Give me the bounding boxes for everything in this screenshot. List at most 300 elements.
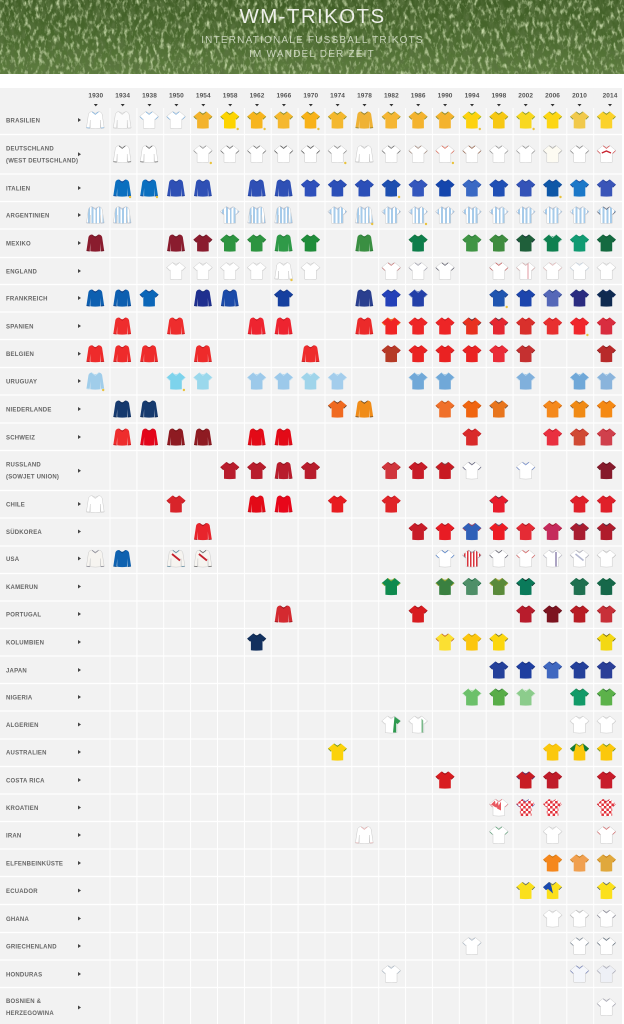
year 1930	[88, 92, 104, 106]
jersey 2014	[597, 112, 616, 129]
year axis	[88, 92, 618, 106]
jersey 2002	[516, 206, 535, 224]
jersey 1950	[167, 550, 185, 567]
row: Kamerun	[6, 578, 616, 595]
year 1950	[169, 92, 184, 106]
jersey 1990	[435, 318, 455, 335]
jersey 1990	[435, 112, 455, 129]
jersey 1966	[275, 428, 292, 446]
jersey 2014	[597, 826, 616, 844]
row: Chile	[6, 496, 616, 513]
arrow	[78, 1006, 81, 1010]
year 1986: 1986	[411, 92, 426, 99]
label: GRIECHENLAND	[6, 944, 57, 950]
jersey 1998	[489, 799, 508, 816]
row: Iran	[6, 826, 616, 844]
jersey 1982	[382, 496, 401, 513]
jersey 1930	[86, 112, 104, 129]
row: Ecuador	[6, 882, 616, 899]
label: ECUADOR	[6, 889, 38, 895]
year 1970	[303, 92, 319, 106]
jersey 1982	[382, 290, 401, 307]
jersey 2002	[516, 318, 535, 335]
year 1994	[465, 92, 480, 106]
row: Costa Rica	[6, 772, 616, 789]
jersey 1938	[140, 146, 158, 163]
jersey 1930	[86, 290, 104, 307]
label: ALGERIEN	[6, 723, 39, 729]
label: ELFENBEINKÜSTE	[6, 860, 63, 867]
jersey 2010	[570, 550, 589, 567]
jersey 2010	[570, 910, 589, 927]
year 1986	[411, 92, 426, 106]
jersey 2010	[570, 662, 589, 679]
jersey 1950	[166, 112, 186, 129]
jersey 1974	[328, 744, 347, 761]
jersey 1934	[113, 146, 131, 163]
label: BELGIEN	[6, 352, 34, 358]
jersey 1966	[274, 290, 293, 307]
jersey 1994	[462, 206, 482, 224]
row: Japan	[6, 662, 616, 679]
jersey 1938	[140, 112, 159, 129]
jersey 2014	[597, 496, 616, 513]
jersey 1974 winner	[328, 146, 347, 164]
year 1978: 1978	[357, 92, 372, 99]
row: Niederlande	[6, 400, 616, 418]
year 1974: 1974	[330, 92, 345, 99]
jersey 2006	[543, 234, 562, 252]
label: URUGUAY	[6, 379, 37, 385]
jersey 1934	[113, 345, 131, 362]
jersey 2010	[570, 606, 589, 623]
jersey 1994	[462, 234, 482, 252]
row: Frankreich	[6, 290, 616, 308]
jersey 1966	[274, 146, 293, 163]
arrow	[78, 916, 81, 920]
jersey 1966	[275, 606, 292, 623]
subtitle: IM WANDEL DER ZEIT	[249, 49, 375, 60]
jersey 2006	[543, 550, 562, 567]
jersey 1990	[435, 180, 455, 197]
jersey 1962	[248, 496, 266, 513]
jersey 1934 winner	[113, 180, 131, 198]
jersey 1990	[435, 772, 455, 789]
jersey 1962	[247, 372, 266, 390]
jersey 2014	[597, 372, 616, 390]
label: (WEST DEUTSCHLAND)	[6, 159, 78, 165]
jersey 1934	[113, 112, 131, 129]
jersey 2014	[597, 523, 616, 540]
jersey 1986	[408, 523, 428, 540]
jersey 1990	[435, 400, 455, 418]
jersey 2010	[570, 523, 589, 540]
jersey 1982	[382, 318, 401, 335]
jersey 1966	[275, 462, 292, 479]
jersey 2006	[543, 262, 562, 280]
jersey 2002	[516, 462, 535, 479]
arrow	[78, 241, 81, 245]
arrow	[78, 695, 81, 699]
jersey 2006	[543, 744, 562, 761]
label: AUSTRALIEN	[6, 750, 47, 756]
jersey 2002	[516, 882, 535, 899]
jersey 1986	[408, 234, 428, 252]
label: ENGLAND	[6, 269, 38, 275]
arrow	[78, 296, 81, 300]
jersey 1990	[435, 345, 455, 362]
jersey 1986	[408, 318, 428, 335]
arrow	[78, 269, 81, 273]
jersey 2006	[543, 910, 562, 927]
year 1966: 1966	[276, 92, 292, 99]
jersey 1986	[408, 262, 428, 280]
header: grass banner	[0, 0, 624, 74]
jersey 1986	[408, 345, 428, 362]
jersey 1994	[462, 146, 482, 163]
jersey 1994	[462, 400, 482, 418]
row: Südkorea	[6, 523, 616, 540]
jersey 1930	[86, 550, 104, 567]
jersey 2014	[597, 318, 616, 335]
row: Argentinien	[6, 206, 616, 225]
arrow	[78, 530, 81, 534]
jersey 2006	[543, 523, 562, 540]
jersey 2010	[570, 400, 589, 418]
jersey 2014	[597, 744, 616, 761]
arrow	[78, 469, 81, 473]
jersey 2010	[570, 966, 589, 983]
jersey 1990	[435, 206, 455, 224]
year 1938	[142, 92, 157, 106]
label: SÜDKOREA	[6, 529, 42, 536]
year 2006: 2006	[545, 92, 560, 99]
jersey 2010	[570, 428, 589, 446]
year 1934: 1934	[115, 92, 130, 99]
jersey 1954	[194, 550, 212, 567]
jersey 2006 winner	[543, 180, 562, 198]
jersey 2002	[516, 523, 535, 540]
jersey 1982	[382, 462, 401, 479]
jersey 2006	[543, 400, 562, 418]
subtitle	[201, 35, 424, 60]
jersey 2014	[597, 234, 616, 252]
jersey 2010 winner	[570, 318, 589, 336]
jersey 1958	[220, 206, 239, 224]
jersey 1998	[489, 826, 508, 844]
row: Bosnien & Herzegowina	[6, 998, 616, 1017]
jersey 2006	[543, 799, 562, 816]
jersey 1998	[489, 234, 508, 252]
jersey 1990	[435, 634, 455, 651]
row: Ghana	[6, 910, 616, 927]
jersey 2006	[543, 206, 562, 224]
jersey 1970	[301, 180, 320, 197]
arrow	[78, 435, 81, 439]
jersey 2014	[597, 998, 616, 1016]
jersey 1954	[193, 372, 212, 390]
arrow	[78, 888, 81, 892]
jersey 1962	[247, 462, 266, 479]
label: BOSNIEN &	[6, 999, 41, 1005]
jersey 1938 winner	[140, 180, 158, 198]
row: Griechenland	[6, 938, 616, 955]
jersey 1974	[328, 206, 347, 224]
jersey 1958	[220, 262, 239, 280]
label: ARGENTINIEN	[6, 213, 50, 219]
year 1958	[223, 92, 238, 106]
jersey 1986	[408, 180, 428, 197]
jersey 1962	[247, 234, 266, 252]
jersey 1986	[408, 290, 428, 307]
jersey 1994 winner	[462, 112, 482, 130]
jersey 1962	[247, 634, 266, 651]
jersey 1974	[328, 180, 347, 197]
jersey 1934	[113, 428, 131, 446]
jersey 1998	[489, 496, 508, 513]
jersey 1958	[220, 146, 239, 163]
jersey 1938	[140, 345, 158, 362]
jersey 1982 winner	[382, 180, 401, 198]
arrow	[78, 502, 81, 506]
arrow	[78, 407, 81, 411]
jersey 2014	[597, 462, 616, 479]
jersey 1934	[113, 206, 131, 224]
jersey 2014	[597, 290, 616, 307]
jersey 2002	[516, 799, 535, 816]
label: KOLUMBIEN	[6, 640, 44, 646]
row: England	[6, 262, 616, 281]
jersey 2006	[543, 826, 562, 844]
jersey 1962	[247, 262, 266, 280]
arrow	[78, 324, 81, 328]
jersey 1970	[302, 345, 319, 362]
jersey 1998	[489, 578, 508, 595]
jersey 1982	[382, 146, 401, 163]
jersey 2014	[597, 716, 616, 733]
jersey 2014	[597, 400, 616, 418]
jersey 1990	[435, 578, 455, 595]
label: FRANKREICH	[6, 296, 48, 302]
jersey 2010	[570, 112, 589, 129]
jersey 1978	[355, 290, 373, 307]
year 1978	[357, 92, 372, 106]
year 1982	[384, 92, 399, 106]
jersey 1978	[355, 400, 373, 418]
jersey 1958	[221, 290, 239, 307]
jersey 1954	[194, 180, 212, 197]
jersey 1994	[462, 345, 482, 362]
year 1998	[491, 92, 507, 106]
jersey 1930 winner	[86, 372, 104, 391]
jersey 1978	[355, 180, 374, 197]
jersey 1950	[167, 318, 185, 335]
row: Belgien	[6, 345, 616, 362]
row: Russland	[6, 462, 616, 480]
jersey 1994	[462, 462, 482, 479]
jersey 2010	[570, 262, 589, 280]
label: JAPAN	[6, 668, 27, 674]
jersey 1938	[140, 290, 159, 307]
jersey 2014	[597, 688, 616, 706]
jersey 1954	[193, 112, 212, 129]
year 2014: 2014	[603, 92, 618, 99]
label: RUSSLAND	[6, 462, 41, 468]
jersey 1990	[435, 372, 455, 390]
year 2010	[572, 92, 587, 106]
label: GHANA	[6, 917, 29, 923]
label: MEXIKO	[6, 241, 31, 247]
jersey 1998	[489, 345, 508, 362]
jersey 2014	[597, 345, 616, 362]
jersey 1982	[382, 112, 401, 129]
jersey 1994	[462, 634, 482, 651]
arrow	[78, 352, 81, 356]
jersey 1998	[489, 146, 508, 163]
jersey 1970	[301, 234, 320, 252]
jersey 2002	[516, 262, 535, 280]
jersey 2010	[570, 290, 589, 307]
jersey 2010	[570, 206, 589, 224]
jersey 1958	[220, 234, 239, 252]
jersey 1962	[248, 180, 266, 197]
year 1962: 1962	[250, 92, 265, 99]
jersey 1962	[248, 318, 266, 335]
jersey 2002	[516, 550, 535, 567]
label: USA	[6, 557, 20, 563]
year 1954: 1954	[196, 92, 211, 99]
year 1962	[250, 92, 265, 106]
jersey 1950	[166, 496, 186, 513]
row: Brasilien	[6, 112, 616, 130]
label: KROATIEN	[6, 806, 38, 812]
jersey 1982	[382, 262, 401, 280]
jersey 1962 winner	[247, 112, 266, 130]
year 2014	[603, 92, 618, 106]
jersey 1930	[86, 234, 104, 252]
label: DEUTSCHLAND	[6, 147, 54, 153]
jersey 2014	[597, 146, 616, 163]
jersey 2002	[516, 290, 535, 307]
arrow	[78, 379, 81, 383]
label: (SOWJET UNION)	[6, 474, 59, 480]
row: Portugal	[6, 606, 616, 623]
jersey 2014	[597, 550, 616, 567]
jersey 2014	[597, 206, 616, 224]
jersey 2002	[516, 345, 535, 362]
label: HONDURAS	[6, 972, 42, 978]
jersey 2006	[543, 318, 562, 335]
jersey 2014	[597, 262, 616, 280]
label: NIEDERLANDE	[6, 407, 52, 413]
year 1934	[115, 92, 130, 106]
jersey 1950	[167, 234, 185, 252]
jersey 1990	[435, 523, 455, 540]
jersey 1978	[355, 112, 373, 129]
jersey 1982	[382, 716, 401, 733]
jersey 2002	[516, 146, 535, 163]
jersey 1978	[355, 234, 373, 252]
jersey 1938	[140, 428, 158, 446]
jersey 2010	[570, 578, 589, 595]
label: IRAN	[6, 833, 21, 839]
year 2006	[545, 92, 560, 106]
year 1998: 1998	[491, 92, 507, 99]
jersey 1970	[301, 462, 320, 479]
jersey 2002	[516, 372, 535, 390]
jersey 2006	[543, 112, 562, 129]
jersey 1954	[194, 428, 212, 446]
jersey 2010	[570, 688, 589, 706]
jersey 1966 winner	[275, 262, 293, 281]
jersey 2010	[570, 180, 589, 197]
jersey 1974	[328, 372, 347, 390]
arrow	[78, 750, 81, 754]
label: BRASILIEN	[6, 119, 40, 125]
jersey 1990	[435, 262, 455, 280]
jersey 1998	[489, 206, 508, 224]
label: NIGERIA	[6, 695, 33, 701]
year 2002	[518, 92, 533, 106]
jersey 2010	[570, 854, 589, 872]
year 1958: 1958	[223, 92, 238, 99]
jersey 2006	[543, 606, 562, 623]
arrow	[78, 806, 81, 810]
jersey 1982	[382, 345, 401, 362]
jersey 1934	[113, 400, 131, 418]
jersey 1970	[301, 146, 320, 163]
title: WM-TRIKOTS	[239, 5, 386, 28]
subtitle: INTERNATIONALE FUSSBALL TRIKOTS	[201, 35, 424, 46]
jersey 2014	[597, 180, 616, 197]
year 1930: 1930	[88, 92, 104, 99]
jersey 1978 winner	[355, 206, 373, 225]
label: ITALIEN	[6, 186, 30, 192]
row: Australien	[6, 744, 616, 761]
jersey 2006	[543, 428, 562, 446]
jersey 2010	[570, 938, 589, 955]
year 1974	[330, 92, 345, 106]
jersey 2010	[570, 716, 589, 733]
jersey 1986	[408, 606, 428, 623]
arrow	[78, 213, 81, 217]
row: Spanien	[6, 318, 616, 336]
year 1950: 1950	[169, 92, 184, 99]
jersey 1998	[489, 400, 508, 418]
jersey 2002	[516, 662, 535, 679]
jersey 1998	[489, 318, 508, 335]
jersey 2014	[597, 772, 616, 789]
jersey 1930	[86, 496, 104, 513]
jersey 1966	[275, 496, 292, 513]
label: SCHWEIZ	[6, 435, 35, 441]
jersey 1962	[247, 146, 266, 163]
jersey 1994	[462, 938, 482, 955]
jersey 2014	[597, 578, 616, 595]
row: Deutschland	[6, 146, 616, 165]
jersey 1954	[193, 262, 212, 280]
arrow	[78, 118, 81, 122]
jersey 1950	[167, 428, 185, 446]
jersey 1954 winner	[193, 146, 212, 164]
jersey 1990	[435, 550, 455, 567]
jersey 1934	[113, 318, 131, 335]
jersey 2002	[516, 606, 535, 623]
jersey 1966	[275, 180, 292, 197]
label: SPANIEN	[6, 324, 34, 330]
jersey 1970	[301, 262, 320, 280]
row: Algerien	[6, 716, 616, 733]
